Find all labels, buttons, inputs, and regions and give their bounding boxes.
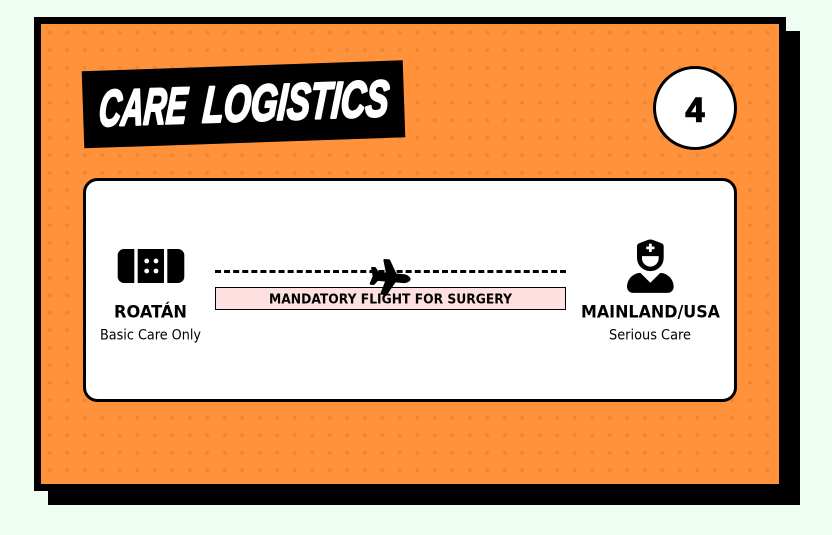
destination label: Mainland/USA: MAINLAND/USA xyxy=(581,302,721,322)
icon: nurse xyxy=(627,239,674,293)
dashed flight route xyxy=(215,270,566,273)
icon: bandage xyxy=(118,249,184,283)
destination note: Serious Care xyxy=(609,328,691,344)
origin note: Basic Care Only xyxy=(100,328,201,344)
panel: care route xyxy=(84,180,736,400)
origin label: Roatán: ROATÁN xyxy=(114,300,187,322)
flight label: MANDATORY FLIGHT FOR SURGERY xyxy=(269,292,513,308)
icon: plane xyxy=(369,258,412,297)
badge: number 4: 4 xyxy=(686,92,705,130)
badge: number 4 xyxy=(654,68,736,148)
flight label xyxy=(216,288,566,310)
title: LOGISTICS xyxy=(201,70,391,133)
title: CARE xyxy=(97,77,190,137)
title xyxy=(82,60,405,148)
